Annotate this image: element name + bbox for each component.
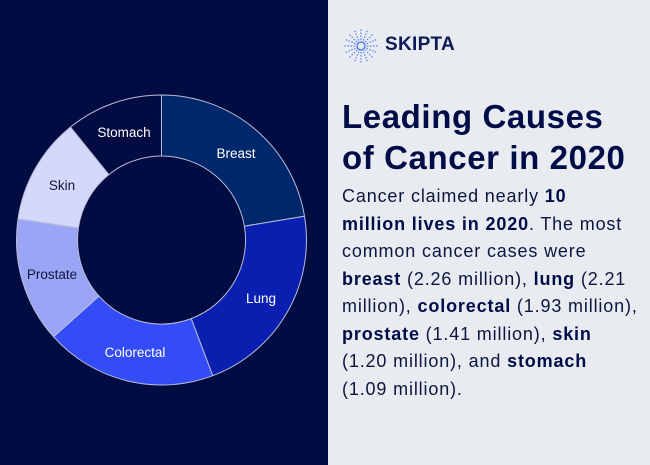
segment: colorectal: Colorectal bbox=[105, 345, 165, 360]
title bbox=[342, 98, 625, 176]
segment: stomach: Stomach bbox=[97, 125, 151, 140]
body text bbox=[342, 186, 638, 399]
body text: (1.09 million). bbox=[342, 378, 463, 398]
segment: breast bbox=[162, 95, 304, 226]
body text: breast (2.26 million), lung (2.21 bbox=[342, 268, 626, 288]
panel: text background bbox=[328, 0, 650, 465]
segment: lung: Lung bbox=[246, 291, 276, 306]
body text: million lives in 2020. The most bbox=[342, 214, 622, 234]
body text: prostate (1.41 million), skin bbox=[342, 324, 592, 344]
logo bbox=[344, 30, 455, 62]
segment: stomach bbox=[70, 95, 162, 175]
segment: prostate: Prostate bbox=[27, 267, 77, 282]
body text: Cancer claimed nearly 10 bbox=[342, 186, 567, 206]
segment: colorectal bbox=[54, 296, 213, 385]
segment: skin: Skin bbox=[49, 178, 75, 193]
logo text: SKIPTA bbox=[385, 34, 455, 55]
segment: lung bbox=[191, 216, 306, 376]
body text: million), colorectal (1.93 million), bbox=[342, 296, 638, 316]
title: of Cancer in 2020 bbox=[342, 139, 625, 176]
panel: chart background bbox=[0, 0, 328, 465]
donut chart bbox=[16, 94, 307, 386]
body text: (1.20 million), and stomach bbox=[342, 351, 587, 371]
body text: common cancer cases were bbox=[342, 241, 586, 261]
title: Leading Causes bbox=[342, 98, 603, 135]
segment: skin bbox=[18, 127, 109, 228]
segment: prostate bbox=[16, 219, 99, 337]
segment: breast: Breast bbox=[216, 146, 256, 161]
icon: starburst bbox=[344, 30, 378, 62]
